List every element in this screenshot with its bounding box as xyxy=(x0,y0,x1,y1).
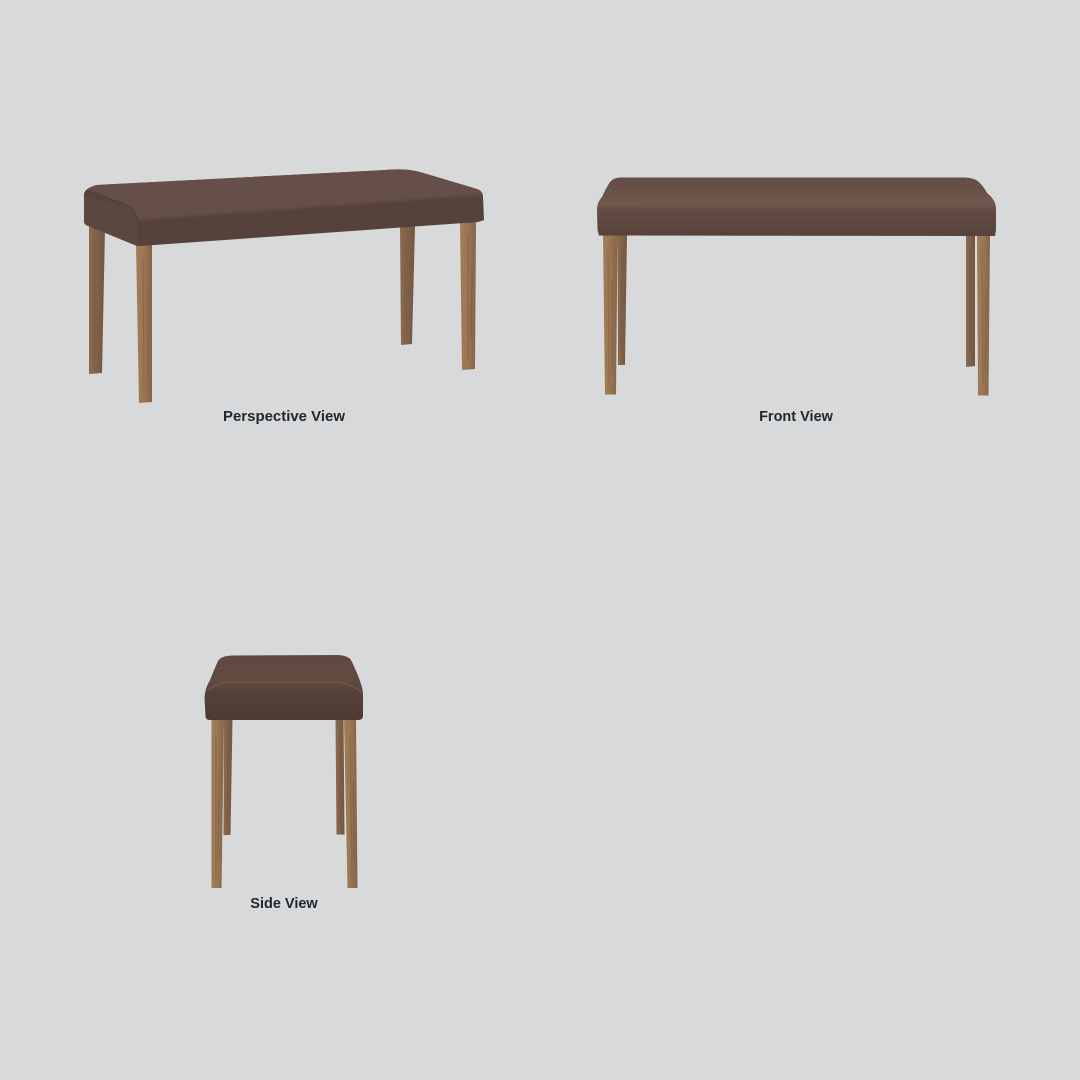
bench: front view xyxy=(597,178,996,396)
seat xyxy=(597,178,996,236)
legs xyxy=(212,718,358,888)
seat xyxy=(204,655,363,720)
legs xyxy=(89,220,476,403)
seat xyxy=(84,169,484,246)
caption: perspective view: Perspective View xyxy=(223,409,346,425)
legs xyxy=(603,234,990,396)
bench: perspective view xyxy=(78,160,490,403)
bench: side view xyxy=(204,655,363,888)
caption: front view: Front View xyxy=(759,409,834,425)
caption: side view: Side View xyxy=(250,896,318,912)
